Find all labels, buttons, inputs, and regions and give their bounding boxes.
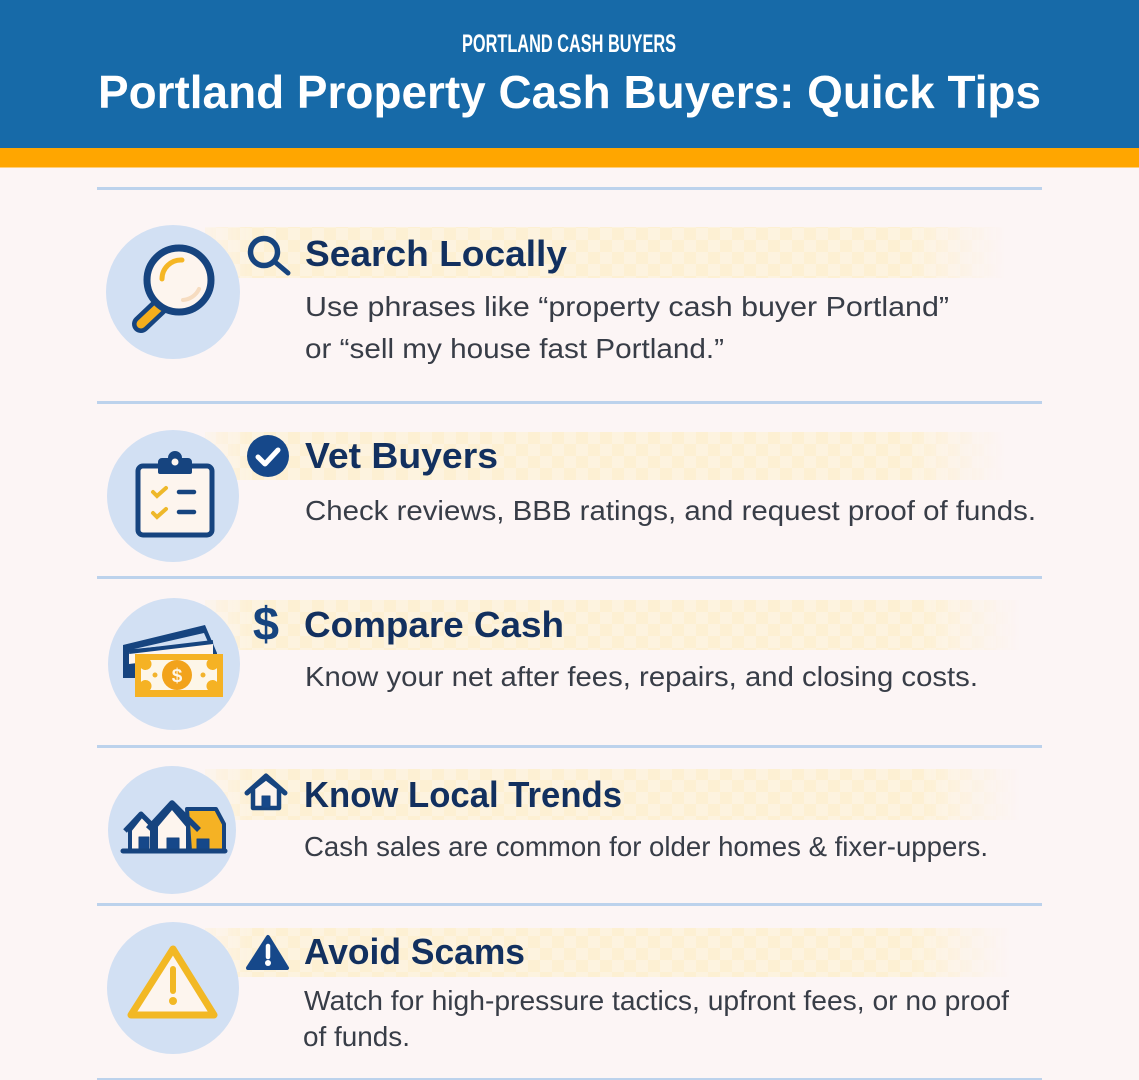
heading: know local trends: Know Local Trends: [304, 774, 622, 815]
text: avoid scams: of funds.: [303, 1021, 410, 1052]
heading: avoid scams: Avoid Scams: [304, 931, 525, 972]
text: know local trends: Cash sales are common for older homes & fixer-uppers.: [304, 831, 988, 862]
panel: avoid scams: [107, 922, 1010, 1054]
text: vet buyers: Check reviews, BBB ratings, and request proof of funds.: [305, 495, 1036, 526]
icon: small warning: [248, 937, 287, 968]
text: avoid scams: [303, 985, 1009, 1052]
icon: dollar sign: $: [253, 597, 279, 650]
text: search locally: or “sell my house fast Portland.”: [305, 333, 724, 364]
heading: search locally: Search Locally: [305, 233, 567, 274]
icon: magnifying glass: [141, 248, 211, 324]
text: compare cash: Know your net after fees, repairs, and closing costs.: [305, 661, 978, 692]
icon: check badge: [247, 435, 289, 477]
panel: know local trends: [108, 766, 1020, 894]
text: avoid scams: Watch for high-pressure tactics, upfront fees, or no proof: [304, 985, 1009, 1016]
icon: cash bills: $: [172, 666, 183, 687]
heading: vet buyers: Vet Buyers: [305, 435, 498, 476]
icon: clipboard: [138, 451, 212, 535]
text: search locally: Use phrases like “property cash buyer Portland”: [305, 291, 949, 322]
icon: warning triangle: [131, 949, 214, 1015]
header brand label: PORTLAND CASH BUYERS: [462, 30, 676, 58]
title: Portland Property Cash Buyers: Quick Tips: [98, 66, 1041, 118]
icon: houses: [123, 803, 225, 851]
icon: cash bills: [123, 625, 223, 697]
icon: small search: [250, 238, 288, 273]
header band: [0, 0, 1139, 168]
panel: vet buyers: [107, 430, 1036, 562]
panel: compare cash: [108, 597, 1020, 730]
icon: small house: [247, 776, 285, 808]
heading: compare cash: Compare Cash: [304, 604, 564, 645]
panel: search locally: [106, 225, 1005, 364]
text: search locally: [305, 291, 949, 364]
